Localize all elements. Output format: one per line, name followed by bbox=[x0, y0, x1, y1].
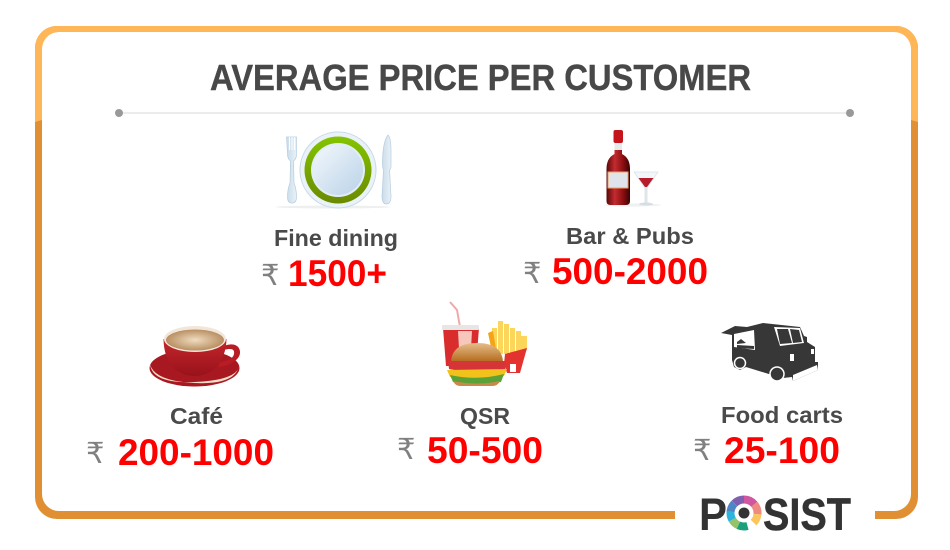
label: cafe: Café bbox=[170, 403, 223, 429]
panel: fine dining bbox=[261, 132, 398, 294]
rupee symbol: ₹ bbox=[86, 436, 104, 470]
rupee symbol: ₹ bbox=[693, 433, 711, 467]
price: 500-2000: 500-2000 bbox=[552, 251, 708, 292]
panel: bar and pubs bbox=[523, 130, 708, 292]
logo letter P: P bbox=[699, 489, 727, 540]
panel: qsr bbox=[397, 302, 543, 471]
price: 50-500: 50-500 bbox=[427, 430, 543, 471]
title divider bbox=[115, 109, 854, 117]
label: food carts: Food carts bbox=[721, 402, 843, 428]
label: bar and pubs: Bar & Pubs bbox=[566, 223, 694, 249]
icon: plate and cutlery bbox=[275, 132, 391, 208]
price: 1500+: 1500+ bbox=[288, 253, 387, 294]
panel: food carts bbox=[693, 323, 843, 471]
icon: wine bottle and glass bbox=[605, 130, 661, 206]
panel: cafe bbox=[86, 326, 274, 473]
price: 200-1000: 200-1000 bbox=[118, 432, 274, 473]
logo: POSIST bbox=[699, 489, 851, 540]
icon: burger, drink and fries bbox=[442, 302, 527, 386]
price: 25-100: 25-100 bbox=[724, 430, 840, 471]
title: AVERAGE PRICE PER CUSTOMER bbox=[210, 57, 751, 98]
rupee symbol: ₹ bbox=[261, 258, 279, 292]
icon: food truck bbox=[721, 323, 818, 381]
logo centre dot bbox=[738, 508, 750, 518]
logo letters SIST: SIST bbox=[763, 489, 851, 540]
rupee symbol: ₹ bbox=[397, 432, 415, 466]
icon: coffee cup bbox=[150, 326, 240, 386]
label: fine dining: Fine dining bbox=[274, 225, 398, 251]
rupee symbol: ₹ bbox=[523, 256, 541, 290]
logo ring bbox=[730, 500, 758, 526]
label: qsr: QSR bbox=[460, 403, 510, 429]
